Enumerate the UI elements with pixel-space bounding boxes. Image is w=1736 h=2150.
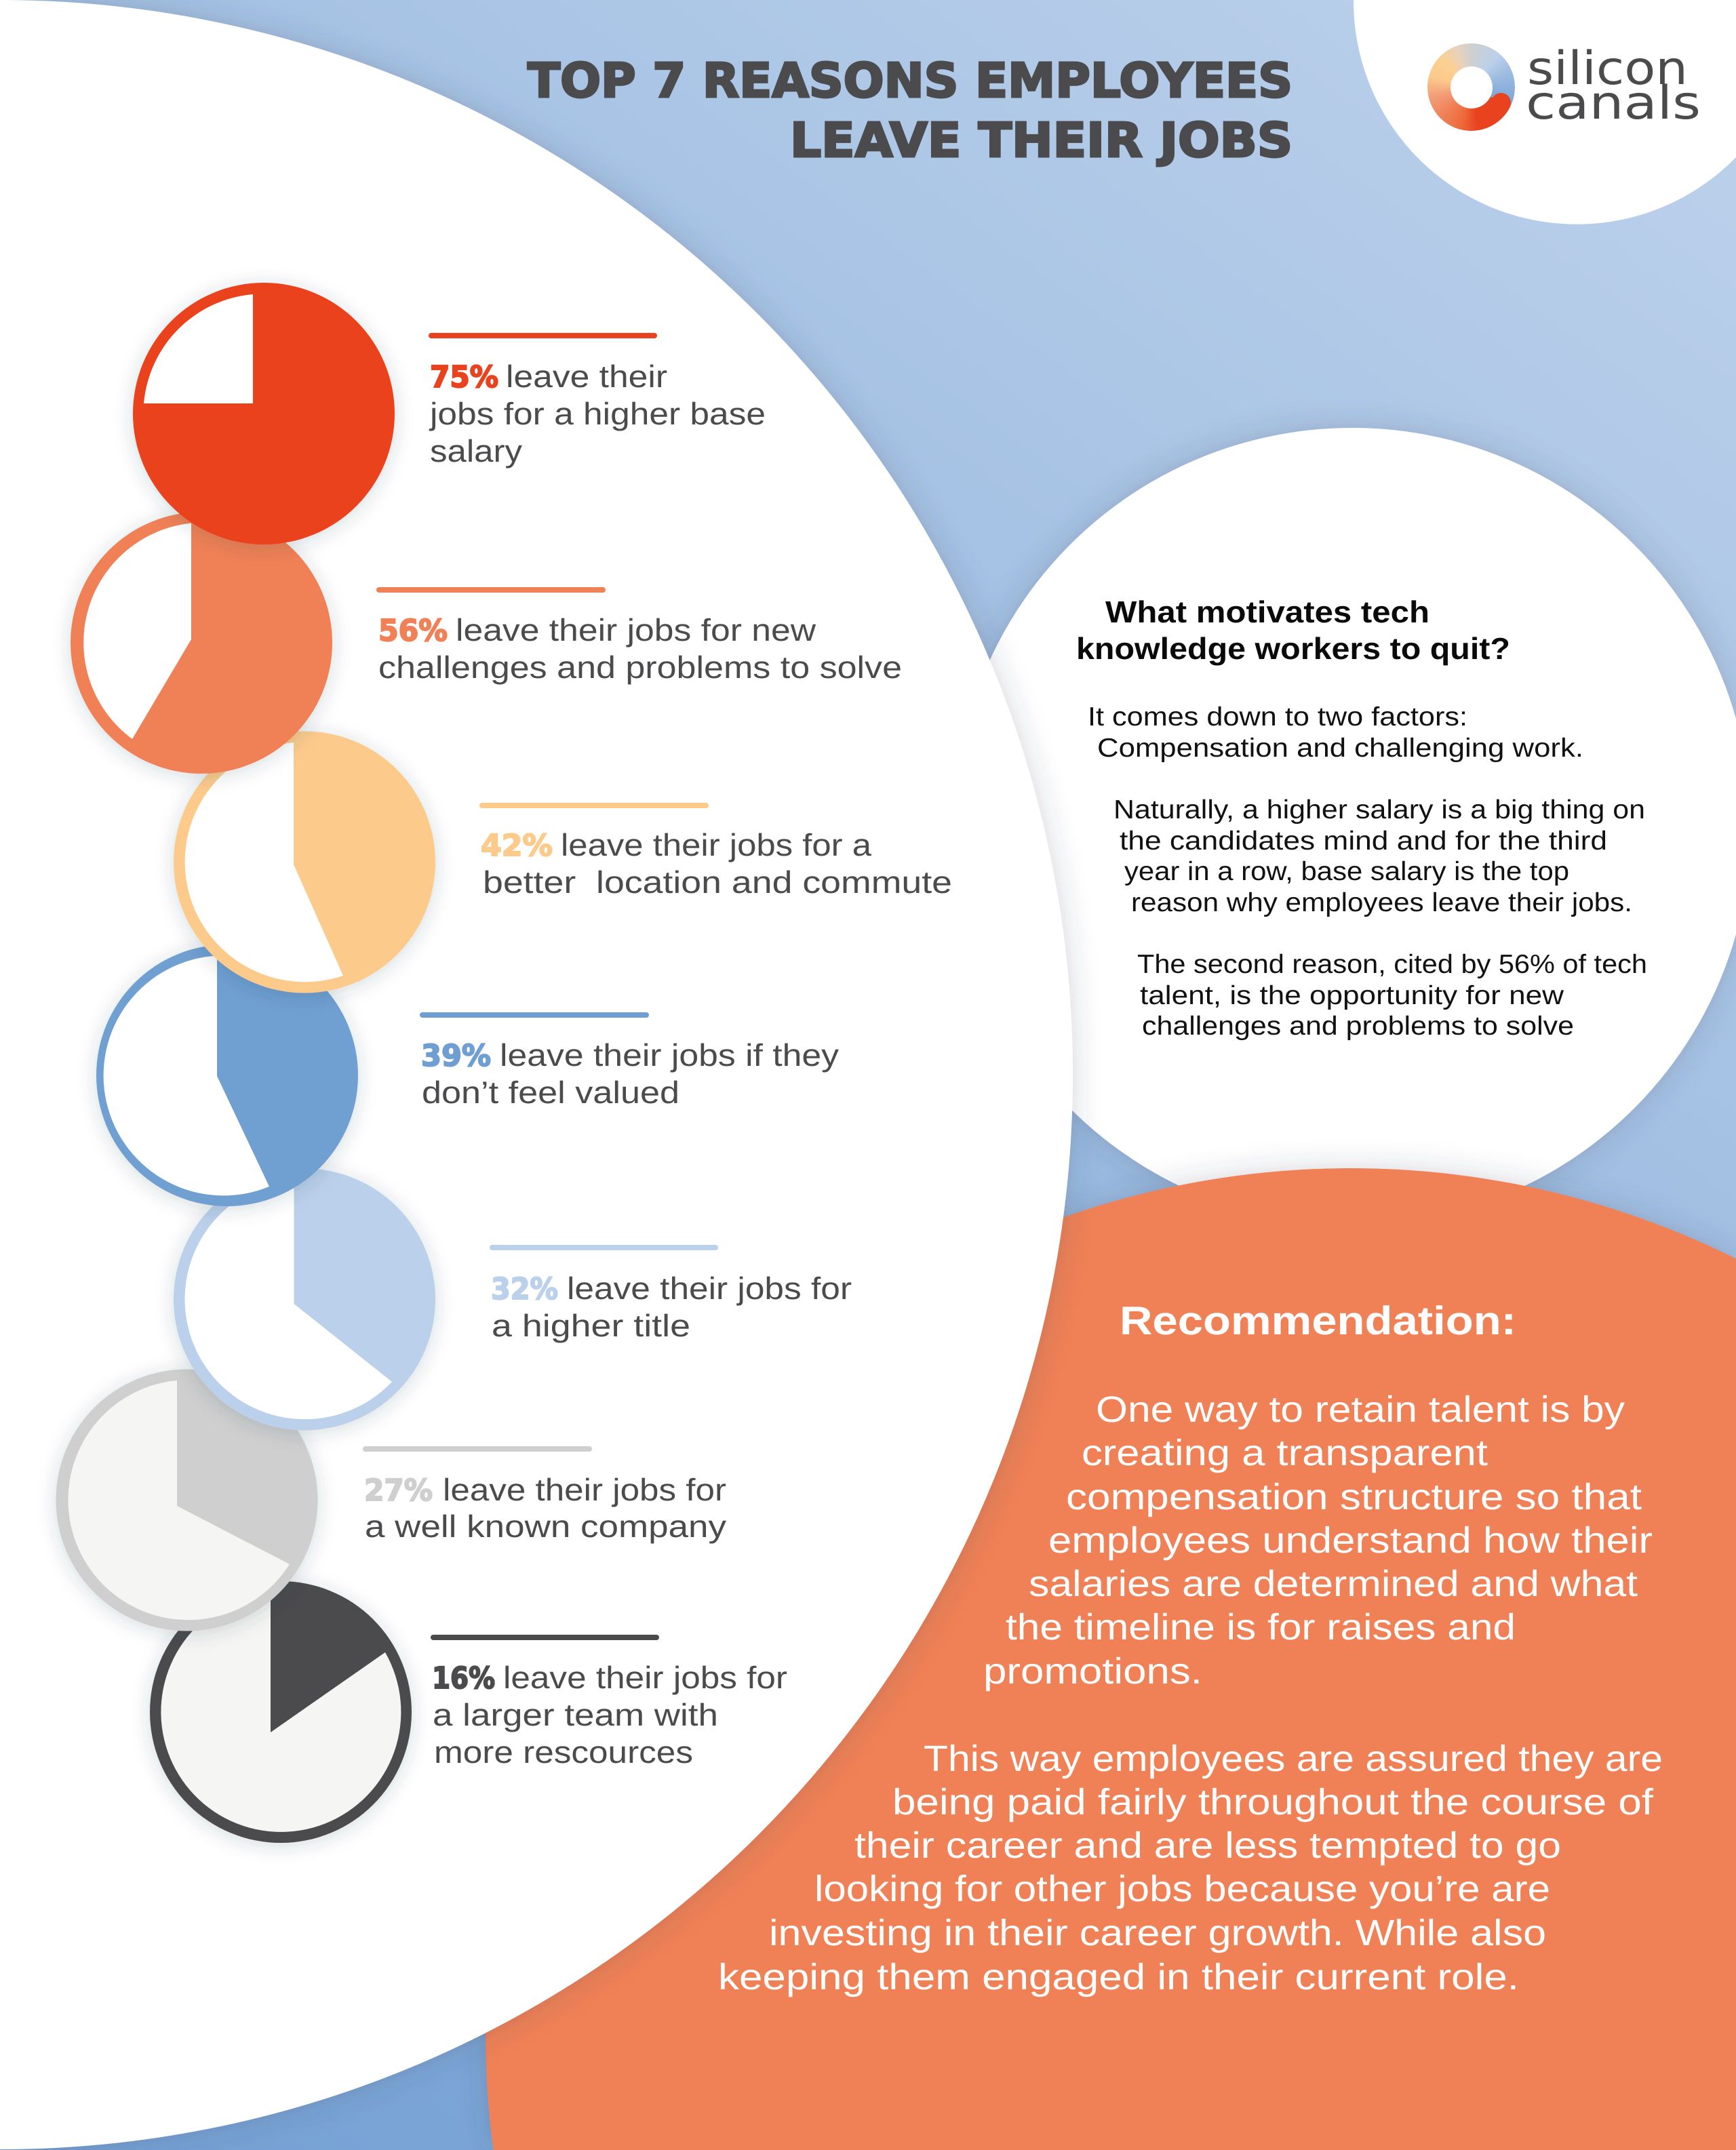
text block: second reason: talent, is the opportunity for new (1140, 981, 1564, 1010)
stat: 75% base salary (429, 333, 766, 469)
stat: 75% base salary: 75% (430, 360, 498, 395)
panel: large white circle (0, 0, 1073, 2149)
text block: transparent compensation: creating a transparent (1082, 1433, 1488, 1473)
stat: 16% larger team: more rescources (434, 1734, 693, 1770)
pie chart: 56% (71, 512, 332, 774)
stat: 42% location and commute: leave their jobs for a (561, 827, 871, 862)
text block: higher salary: year in a row, base salary is the top (1124, 857, 1569, 886)
text block: paid fairly (718, 1738, 1663, 1997)
text block: transparent compensation (983, 1389, 1653, 1692)
stat: 32% higher title: 32% (491, 1272, 558, 1307)
stat: 56% new challenges: challenges and problems to solve (378, 650, 902, 685)
text block: second reason (1137, 950, 1647, 1041)
stat: 32% higher title (490, 1245, 852, 1343)
heading: what motivates: What motivates tech (1105, 595, 1429, 629)
logo wordmark: silicon (1527, 42, 1688, 96)
stat: 42% location and commute: better location and commute (483, 864, 952, 900)
text block: paid fairly: This way employees are assured they are (924, 1738, 1663, 1779)
text block: paid fairly: investing in their career growth. While also (769, 1913, 1546, 1953)
title: LEAVE THEIR JOBS (790, 113, 1293, 168)
stat: 16% larger team: 16% (432, 1661, 495, 1696)
stat: 27% well known company: 27% (364, 1473, 433, 1508)
title (528, 53, 1293, 168)
stat: 39% not valued: don’t feel valued (422, 1075, 679, 1110)
text block: transparent compensation: the timeline is for raises and (1006, 1607, 1516, 1648)
stat: 32% higher title: a higher title (492, 1308, 690, 1343)
stat: 32% higher title: leave their jobs for (567, 1271, 852, 1306)
stat: 56% new challenges: leave their jobs for new (456, 612, 816, 648)
text block: two factors (1088, 702, 1583, 763)
icon: logo ring (1427, 43, 1515, 131)
stat: 39% not valued: leave their jobs if they (500, 1037, 839, 1073)
text block: two factors: Compensation and challenging work. (1097, 734, 1583, 763)
text block: transparent compensation: One way to retain talent is by (1096, 1389, 1625, 1430)
text block: higher salary: Naturally, a higher salary is a big thing on (1113, 795, 1645, 824)
stat: 27% well known company (363, 1446, 726, 1544)
text block: paid fairly: keeping them engaged in their current role. (718, 1957, 1519, 1997)
stat: 75% base salary: salary (430, 433, 522, 469)
text block: second reason: challenges and problems to solve (1142, 1012, 1574, 1041)
stat: 42% location and commute: 42% (481, 829, 553, 863)
stat: 75% base salary: leave their (506, 359, 667, 394)
stat: 39% not valued: 39% (421, 1039, 491, 1073)
text block: transparent compensation: employees understand how their (1048, 1520, 1653, 1561)
text block: higher salary: the candidates mind and for the third (1120, 827, 1607, 856)
text block: paid fairly: being paid fairly throughout the course of (892, 1782, 1654, 1823)
text block: paid fairly: their career and are less tempted to go (854, 1825, 1561, 1866)
text block: two factors: It comes down to two factors: (1088, 702, 1467, 732)
pie chart: 42% (174, 731, 435, 993)
pie chart: 39% (96, 944, 358, 1206)
pie chart: 27% (56, 1370, 317, 1631)
heading: what motivates (1076, 595, 1510, 666)
stat: 39% not valued (420, 1012, 839, 1110)
title: TOP 7 REASONS EMPLOYEES (528, 53, 1293, 108)
panel: orange recommendation circle (486, 1168, 1736, 2150)
text block: transparent compensation: compensation structure so that (1066, 1477, 1642, 1517)
text block: transparent compensation: salaries are determined and what (1029, 1564, 1638, 1604)
text block: higher salary (1113, 795, 1645, 917)
stat: 75% base salary: jobs for a higher base (429, 396, 766, 431)
panel: logo corner circle (1354, 0, 1736, 224)
stat: 56% new challenges (376, 587, 902, 685)
stat: 56% new challenges: 56% (378, 614, 448, 648)
stat: 16% larger team (431, 1635, 787, 1770)
stat: 27% well known company: leave their jobs for (443, 1472, 726, 1507)
text block: second reason: The second reason, cited by 56% of tech (1137, 950, 1647, 979)
logo wordmark: canals (1526, 77, 1701, 130)
pie chart: 32% (174, 1169, 435, 1431)
heading: what motivates: knowledge workers to quit? (1076, 631, 1510, 666)
panel: right white circle (953, 428, 1736, 1225)
pie chart: 75% (133, 283, 395, 544)
text block: higher salary: reason why employees leave their jobs. (1131, 888, 1632, 917)
pie chart: 16% (150, 1581, 412, 1843)
heading: recommendation: Recommendation: (1120, 1298, 1516, 1343)
stat: 16% larger team: a larger team with (433, 1697, 718, 1732)
stat: 42% location and commute (479, 803, 952, 900)
logo wordmark (1526, 42, 1701, 130)
stat: 16% larger team: leave their jobs for (503, 1660, 787, 1695)
text block: paid fairly: looking for other jobs because you’re are (814, 1869, 1550, 1909)
stat: 27% well known company: a well known company (365, 1509, 726, 1544)
text block: transparent compensation: promotions. (983, 1651, 1202, 1692)
